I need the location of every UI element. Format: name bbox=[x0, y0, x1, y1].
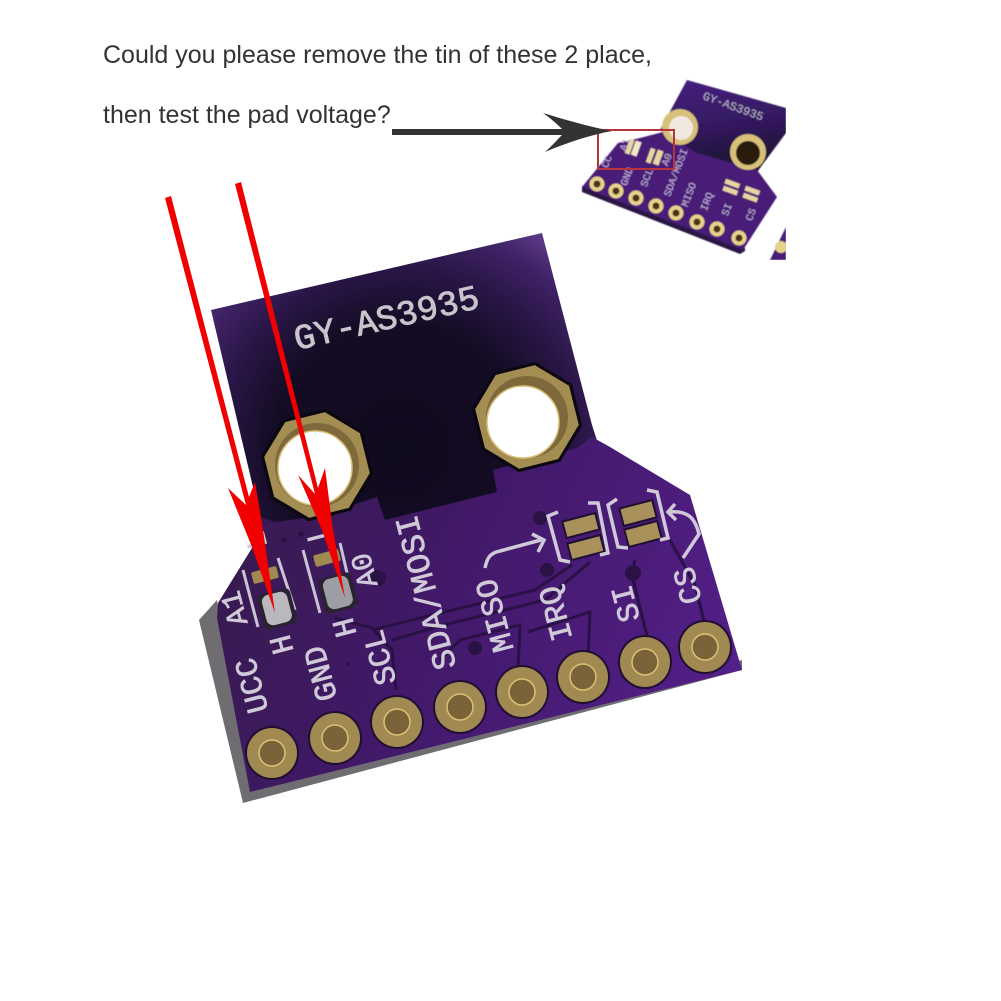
pad 2 bbox=[308, 711, 362, 765]
label A0: A0 bbox=[346, 549, 386, 591]
jumper A0 soldered bbox=[303, 543, 359, 615]
pad 5 bbox=[495, 665, 549, 719]
inset lower section bbox=[582, 132, 777, 250]
label L left: L bbox=[240, 527, 276, 553]
label L right: L bbox=[300, 520, 336, 546]
silkscreen labels bbox=[216, 511, 712, 716]
label SDA/MOSI: SDA/MOSI bbox=[390, 511, 466, 673]
jumper pads IRQ bbox=[561, 512, 606, 561]
label H right: H bbox=[328, 614, 366, 640]
silkscreen brackets and arrows bbox=[485, 490, 699, 568]
label GND: GND bbox=[299, 642, 347, 704]
inset labels: SCL bbox=[639, 167, 657, 189]
neighbouring board fragment bbox=[770, 227, 787, 260]
red arrow right bbox=[235, 182, 345, 598]
inset title: GY-AS3935 bbox=[701, 90, 765, 124]
inset antenna panel bbox=[660, 80, 786, 172]
inset labels: CS bbox=[744, 207, 760, 223]
label SCL: SCL bbox=[358, 626, 406, 688]
inset labels: SDA/MOSI bbox=[662, 147, 692, 199]
mounting nut left bbox=[255, 403, 379, 527]
inset labels bbox=[600, 137, 760, 223]
jumper A1 soldered bbox=[243, 558, 298, 631]
header pads bbox=[245, 620, 732, 780]
label MISO: MISO bbox=[471, 575, 523, 655]
inset labels: A0 bbox=[660, 152, 676, 168]
inset labels: GND bbox=[619, 166, 637, 188]
label H left: H bbox=[265, 631, 303, 657]
main board bbox=[199, 233, 742, 803]
board edge bbox=[199, 600, 742, 803]
label A1: A1 bbox=[216, 587, 256, 629]
caption line 1: Could you please remove the tin of these 2 place, bbox=[103, 41, 652, 69]
inset nut left bbox=[662, 109, 698, 145]
pad 4 bbox=[433, 680, 487, 734]
inset jumper pads bbox=[625, 139, 760, 203]
inset labels: SI bbox=[720, 202, 736, 218]
pad 7 bbox=[618, 635, 672, 689]
red arrow left bbox=[165, 196, 275, 613]
page bbox=[103, 45, 786, 803]
inset header pads bbox=[590, 176, 746, 246]
pad 1 bbox=[245, 726, 299, 780]
mounting nut right bbox=[466, 356, 588, 478]
inset labels: IRQ bbox=[699, 191, 717, 213]
pad 3 bbox=[370, 695, 424, 749]
pad 8 bbox=[678, 620, 732, 674]
inset nut right bbox=[730, 134, 766, 170]
inset labels: MISO bbox=[680, 181, 700, 209]
reference photo inset bbox=[582, 80, 787, 260]
jumper pads SI bbox=[618, 499, 663, 548]
label UCC: UCC bbox=[230, 654, 278, 716]
pad 6 bbox=[556, 650, 610, 704]
vias bbox=[281, 511, 641, 666]
red highlight rectangle bbox=[598, 130, 674, 169]
inset labels: A1 bbox=[618, 137, 634, 153]
upper antenna panel bbox=[211, 233, 600, 530]
lower purple section bbox=[217, 437, 742, 792]
caption line 2: then test the pad voltage? bbox=[103, 101, 391, 129]
black pointer arrow bbox=[392, 113, 612, 152]
inset board edge bbox=[582, 186, 745, 254]
traces bbox=[335, 540, 705, 690]
label IRQ: IRQ bbox=[534, 582, 582, 644]
board title: GY-AS3935 bbox=[290, 279, 484, 361]
label SI: SI bbox=[606, 581, 650, 625]
inset labels: CC bbox=[600, 154, 616, 170]
label CS: CS bbox=[668, 563, 712, 607]
